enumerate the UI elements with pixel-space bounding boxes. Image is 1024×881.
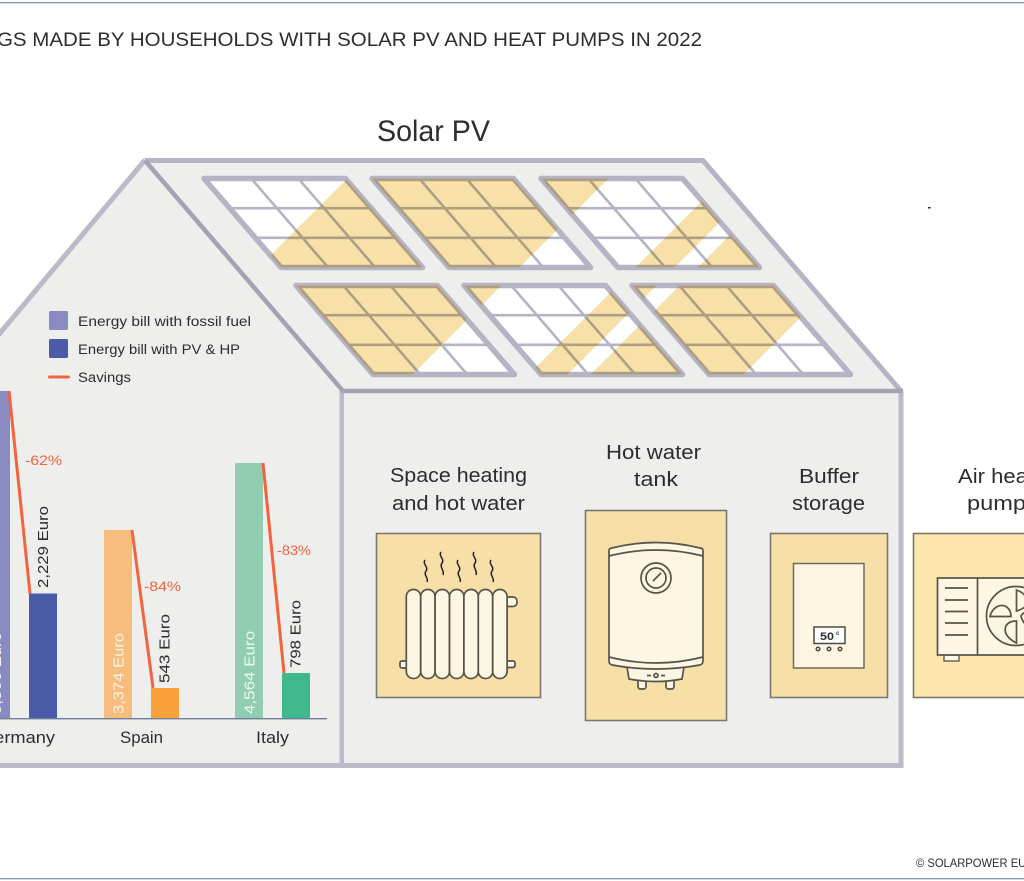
solar panel 4 <box>296 286 514 374</box>
icon: buffer storage <box>770 534 888 698</box>
Spain bars: Spain <box>120 729 163 747</box>
Spain bars: 3,374 Euro <box>110 633 128 714</box>
label: space heating: Space heating <box>390 465 527 487</box>
solar panels <box>201 176 854 378</box>
icon: buffer storage: 50 <box>820 631 834 643</box>
solar panel 2 <box>372 178 590 268</box>
legend: fossil fuel: Energy bill with fossil fuel <box>78 314 251 329</box>
chart axis <box>0 718 327 719</box>
icon: radiator <box>376 534 540 698</box>
Germany bars <box>0 391 62 747</box>
heading: Solar PV: Solar PV <box>377 115 490 148</box>
panel: right wall <box>342 391 901 766</box>
icon: buffer storage: c <box>836 631 840 637</box>
legend: fossil fuel <box>49 311 251 330</box>
small mark <box>928 207 930 208</box>
sunlight bands on panels <box>270 178 801 374</box>
icon: hot water tank <box>586 510 726 720</box>
Italy bars: Italy <box>256 729 290 747</box>
label: air heat pump: pump <box>967 493 1024 515</box>
solar panel 1 <box>204 178 422 268</box>
label: space heating: and hot water <box>392 493 525 515</box>
Italy bars <box>235 463 311 747</box>
legend <box>48 311 251 385</box>
solar panel 5 <box>464 286 682 374</box>
top rule <box>0 2 1024 3</box>
Spain bars: 543 Euro <box>156 614 174 683</box>
solar panel 6 <box>632 286 850 374</box>
legend: PV and HP <box>49 339 240 358</box>
Germany bars: -62% <box>25 453 62 468</box>
panel: roof <box>145 160 903 391</box>
Germany bars: 2,229 Euro <box>35 506 52 588</box>
legend: savings: Savings <box>78 370 131 385</box>
icon: air heat pump <box>914 534 1024 698</box>
label: hot water tank: Hot water <box>606 442 701 464</box>
legend: savings <box>48 370 131 385</box>
bottom rule <box>0 878 1024 879</box>
solar panel 3 <box>541 178 760 268</box>
label: hot water tank: tank <box>634 469 679 491</box>
bar chart <box>0 391 327 747</box>
Spain bars <box>104 530 181 747</box>
panel: house gable with chart <box>0 160 343 766</box>
Italy bars: 798 Euro <box>288 600 304 668</box>
label: buffer storage: Buffer <box>799 466 859 488</box>
Spain bars: -84% <box>144 579 181 594</box>
Italy bars: 4,564 Euro <box>242 631 258 714</box>
legend: PV and HP: Energy bill with PV & HP <box>78 342 240 357</box>
label: buffer storage: storage <box>792 493 865 515</box>
Italy bars: -83% <box>277 543 311 558</box>
